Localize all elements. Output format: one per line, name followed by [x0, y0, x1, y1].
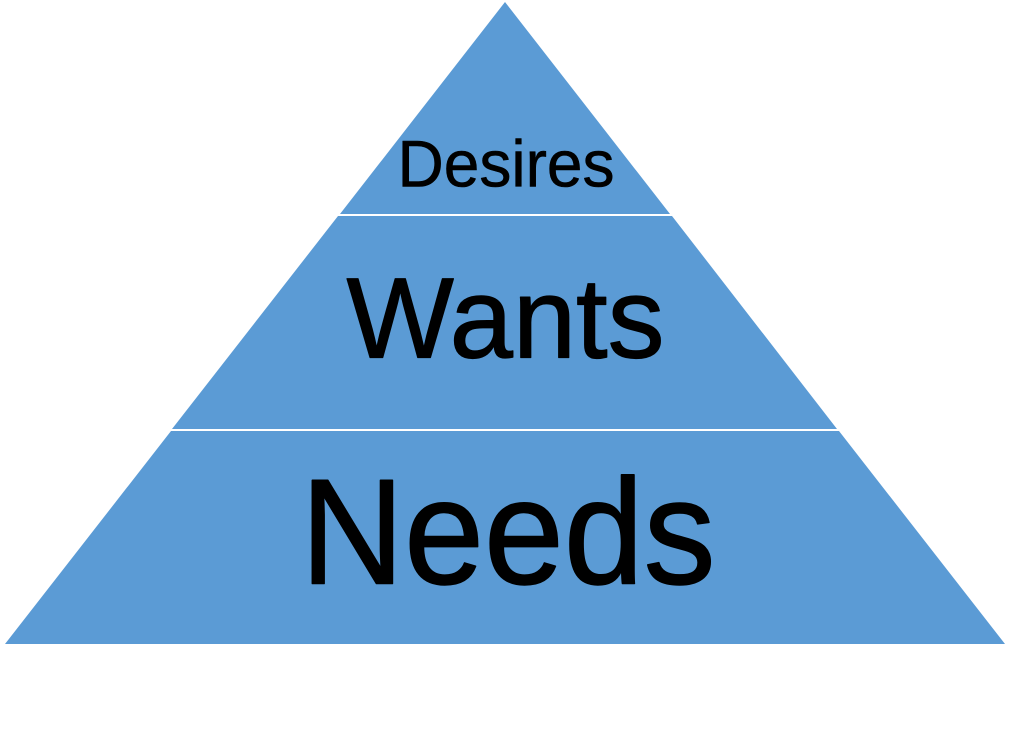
label: wants: Wants	[346, 256, 664, 382]
label: desires: Desires	[398, 127, 614, 201]
pyramid tier: needs	[5, 431, 1005, 644]
pyramid tier: wants	[172, 216, 837, 429]
pyramid tier: desires	[340, 2, 670, 214]
label: needs: Needs	[300, 448, 716, 616]
